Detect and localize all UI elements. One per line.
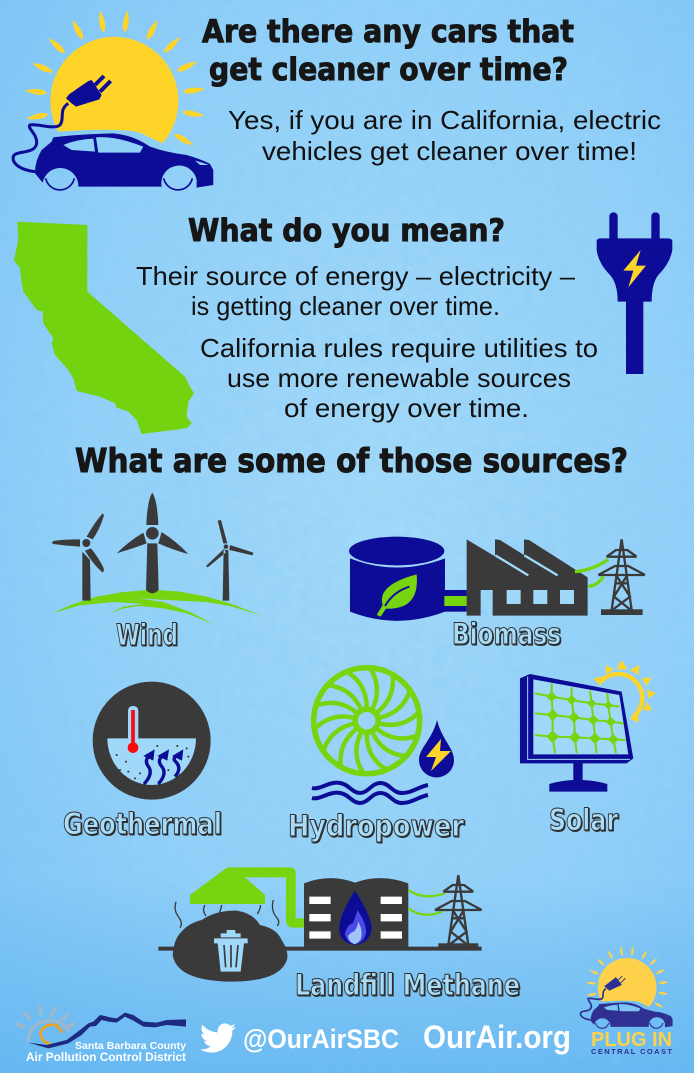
panel frame <box>520 674 633 763</box>
logo mountains <box>28 1013 186 1048</box>
turbine right hub <box>224 544 228 549</box>
icon: biomass plant <box>349 537 645 621</box>
explanation text: is getting cleaner over time. <box>191 291 500 321</box>
intro text: Yes, if you are in California, electric <box>228 105 661 135</box>
car body <box>35 133 213 188</box>
label: solar: Solar <box>549 803 619 837</box>
label: geothermal: Geothermal <box>63 807 222 841</box>
logo text line two: Air Pollution Control District <box>26 1052 186 1064</box>
explanation text: use more renewable sources <box>227 363 571 393</box>
panel grid nodes <box>546 691 619 745</box>
arrow heads <box>143 749 183 761</box>
plug head <box>66 80 102 107</box>
thermometer mercury <box>127 710 138 745</box>
logo: Plug In Central Coast <box>581 946 673 1056</box>
icon: twitter bird <box>200 1023 236 1053</box>
turbine centre <box>117 493 188 593</box>
label: biomass: Biomass <box>452 617 561 651</box>
car windows <box>63 137 208 165</box>
small cord <box>581 989 606 1020</box>
plug prongs <box>95 76 111 92</box>
turbine left <box>52 513 104 601</box>
thermometer tube <box>128 706 138 740</box>
ground bowl <box>107 738 196 785</box>
title <box>202 14 574 88</box>
logo artwork <box>15 1005 186 1048</box>
label: hydropower: Hydropower <box>288 809 465 843</box>
panel stand <box>549 760 607 792</box>
collection hood <box>190 867 304 928</box>
title: Are there any cars that <box>202 14 574 50</box>
small sun and car <box>581 946 673 1028</box>
small wheel arcs <box>596 1023 663 1028</box>
leaf <box>377 574 417 617</box>
heading: sources: What are some of those sources? <box>75 441 628 480</box>
turbine right <box>206 520 253 601</box>
intro text <box>228 105 661 166</box>
tank body <box>350 558 445 621</box>
logo spiral <box>41 1025 62 1043</box>
explanation text: of energy over time. <box>284 393 529 423</box>
turbine left hub <box>82 539 90 547</box>
flame middle <box>345 910 366 944</box>
lightning bolt <box>426 739 451 771</box>
twitter handle: @OurAirSBC <box>243 1024 399 1054</box>
icon: electric plug <box>597 212 672 374</box>
inner frame line <box>528 677 630 759</box>
factory <box>467 539 588 616</box>
power wires <box>408 890 445 915</box>
trash can ribs <box>224 945 238 967</box>
small sun disc <box>598 958 657 1007</box>
sun spikes <box>593 660 656 723</box>
soil specks <box>117 746 188 778</box>
gas wisps <box>175 900 279 928</box>
intro text: vehicles get cleaner over time! <box>262 136 637 166</box>
logo text: Santa Barbara County <box>75 1041 186 1052</box>
icon: California map <box>14 222 194 434</box>
sun arc <box>601 674 642 717</box>
plug in text: PLUG IN <box>591 1029 672 1051</box>
sun rays <box>25 10 205 148</box>
explanation text <box>136 261 598 423</box>
pipe green <box>444 596 467 606</box>
leaf vein <box>385 587 409 606</box>
pylon <box>598 539 645 615</box>
turbine centre hub <box>146 527 159 540</box>
icon: wind turbines <box>52 493 263 624</box>
icon: geothermal <box>93 682 211 800</box>
flame <box>339 891 372 945</box>
water waves <box>312 783 428 803</box>
panel grid <box>535 683 626 753</box>
disc <box>93 682 211 800</box>
explanation text: California rules require utilities to <box>200 333 598 363</box>
power wires <box>575 559 608 587</box>
website: OurAir.org <box>423 1019 571 1055</box>
sun disc <box>50 37 178 143</box>
water wheel <box>314 668 420 774</box>
logo sun arc <box>28 1021 69 1042</box>
generator windows <box>309 897 402 939</box>
car wheel arcs <box>46 178 192 190</box>
small car windows <box>604 1004 640 1011</box>
title: get cleaner over time? <box>209 52 568 88</box>
heading: what do you mean: What do you mean? <box>188 213 505 249</box>
logo: Santa Barbara County APCD <box>15 1005 186 1064</box>
landfill mound <box>173 911 287 982</box>
water drop <box>419 720 454 778</box>
pylon <box>435 875 482 945</box>
icon: solar panel <box>520 660 656 792</box>
tank <box>349 537 444 565</box>
charging cord <box>13 103 68 172</box>
factory windows <box>507 590 574 604</box>
hill <box>52 590 263 624</box>
pipe lower <box>444 606 467 612</box>
icon: hydropower <box>312 668 454 803</box>
factory slits <box>495 555 558 575</box>
logo sun rays <box>15 1005 75 1042</box>
thermometer bulb <box>128 742 138 753</box>
heat arrows <box>144 755 179 784</box>
label: wind: Wind <box>116 618 178 652</box>
explanation text: Their source of energy – electricity – <box>136 261 576 291</box>
flame core <box>348 922 362 944</box>
ground line <box>158 947 482 951</box>
small plug <box>605 976 625 990</box>
label: landfill methane: Landfill Methane <box>295 968 520 1002</box>
generator building <box>304 878 408 947</box>
icon: sun and electric car <box>13 10 213 190</box>
central coast text: CENTRAL COAST <box>591 1047 672 1056</box>
small rays <box>586 946 669 1009</box>
pipe <box>444 590 467 596</box>
small car body <box>591 1002 673 1027</box>
pylon base <box>438 943 478 948</box>
icon: landfill methane plant <box>158 867 482 982</box>
panel glass <box>533 679 628 754</box>
trash can <box>214 930 248 972</box>
